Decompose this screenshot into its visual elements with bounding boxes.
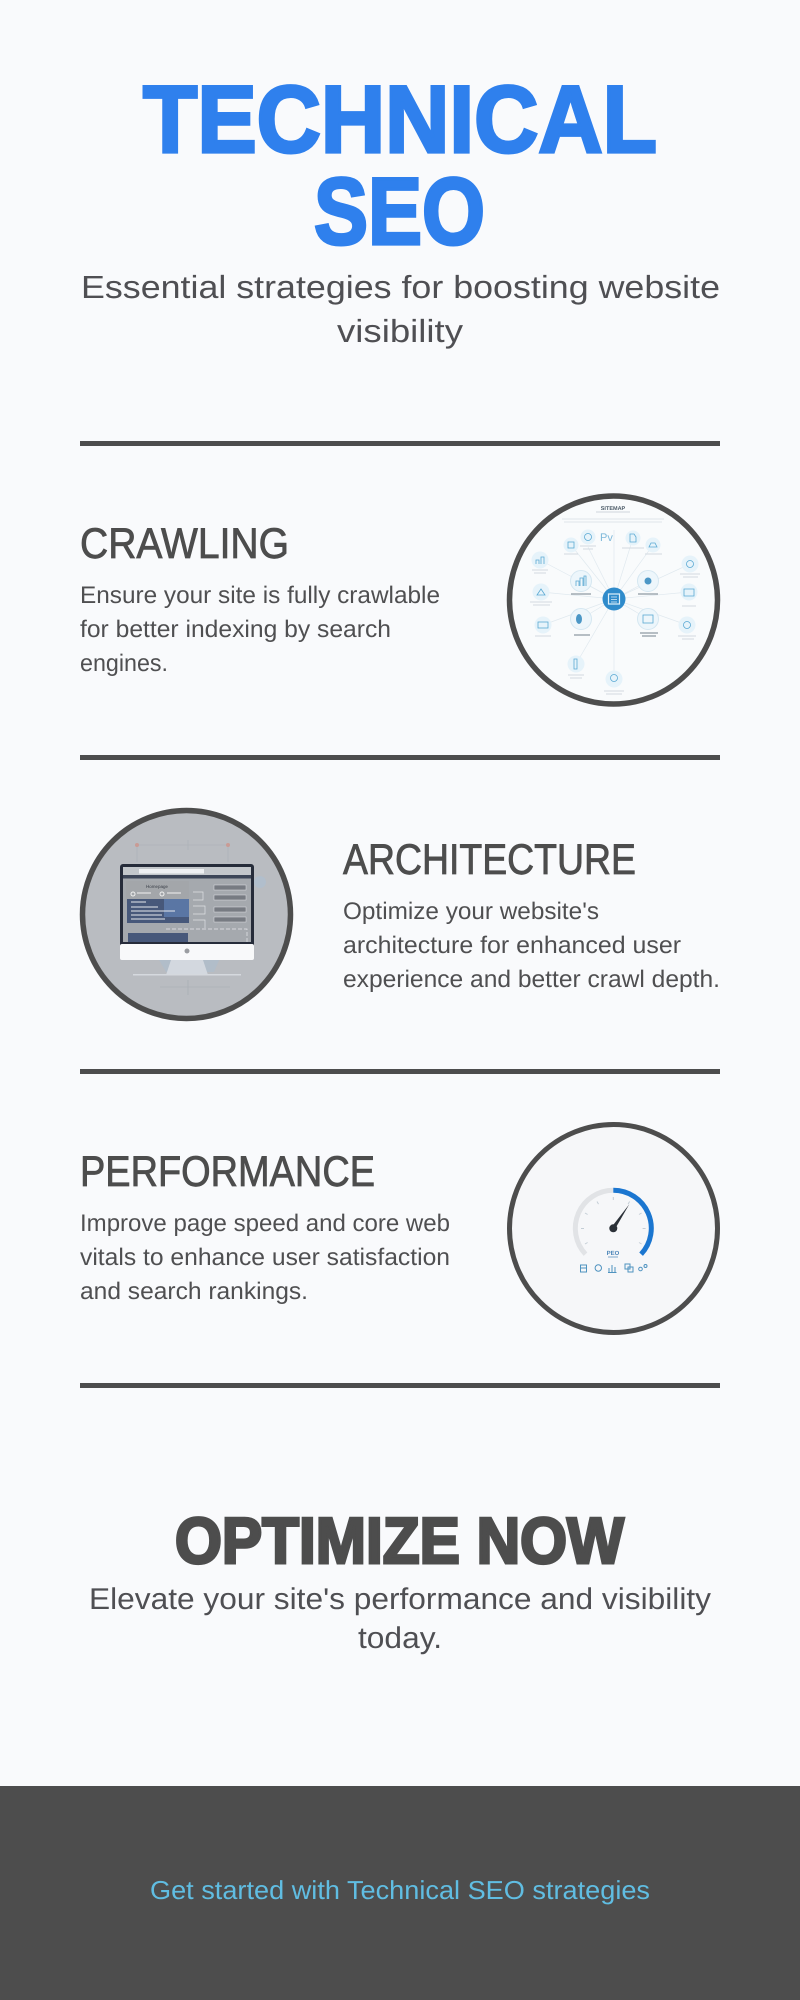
panel: performance [80, 1124, 718, 1332]
architecture text: Optimize your website's [343, 898, 599, 925]
crawling text: for better indexing by search [80, 616, 391, 643]
crawling text [80, 582, 440, 677]
subtitle: visibility [337, 313, 463, 349]
performance text [80, 1210, 450, 1305]
icon: sitemap circle: SITEMAP [601, 506, 626, 512]
icon: speed gauge circle [510, 1124, 718, 1332]
subtitle: Essential strategies for boosting website [81, 269, 720, 305]
subtitle [81, 269, 720, 349]
architecture heading: ARCHITECTURE [343, 836, 636, 884]
architecture text: architecture for enhanced user [343, 932, 681, 959]
title: TECHNICAL [143, 67, 657, 173]
gauge arc [575, 1190, 651, 1254]
panel: architecture [82, 810, 720, 1018]
footer text: Get started with Technical SEO strategies [150, 1875, 650, 1905]
gauge ticks [581, 1197, 646, 1244]
sitemap centre node [602, 588, 626, 610]
panel: crawling [80, 496, 718, 704]
call to action heading: OPTIMIZE NOW [175, 1504, 625, 1577]
sitemap nodes: Pv [600, 532, 613, 544]
crawling heading: CRAWLING [80, 520, 289, 568]
icon: speed gauge circle: PEO [607, 1250, 620, 1257]
architecture text [343, 898, 720, 993]
crawling text: Ensure your site is fully crawlable [80, 582, 440, 609]
footer [0, 1786, 800, 2000]
crawling text: engines. [80, 650, 168, 677]
performance heading: PERFORMANCE [80, 1148, 375, 1196]
gauge small icons [580, 1264, 647, 1272]
gauge needle [609, 1204, 629, 1232]
icon: website monitor circle [82, 810, 290, 1018]
icon: website monitor circle: Homepage [146, 884, 169, 889]
monitor [120, 864, 254, 958]
call to action text: today. [358, 1622, 442, 1655]
call to action text [89, 1583, 711, 1655]
icon: sitemap circle [510, 496, 718, 704]
sitemap nodes [530, 530, 700, 694]
performance text: Improve page speed and core web [80, 1210, 450, 1237]
title: SEO [314, 159, 485, 265]
performance text: vitals to enhance user satisfaction [80, 1244, 450, 1271]
sitemap hubs [570, 570, 658, 636]
monitor stand [166, 960, 208, 975]
architecture text: experience and better crawl depth. [343, 966, 720, 993]
title [143, 67, 657, 265]
performance text: and search rankings. [80, 1278, 308, 1305]
call to action text: Elevate your site's performance and visibility [89, 1583, 711, 1616]
